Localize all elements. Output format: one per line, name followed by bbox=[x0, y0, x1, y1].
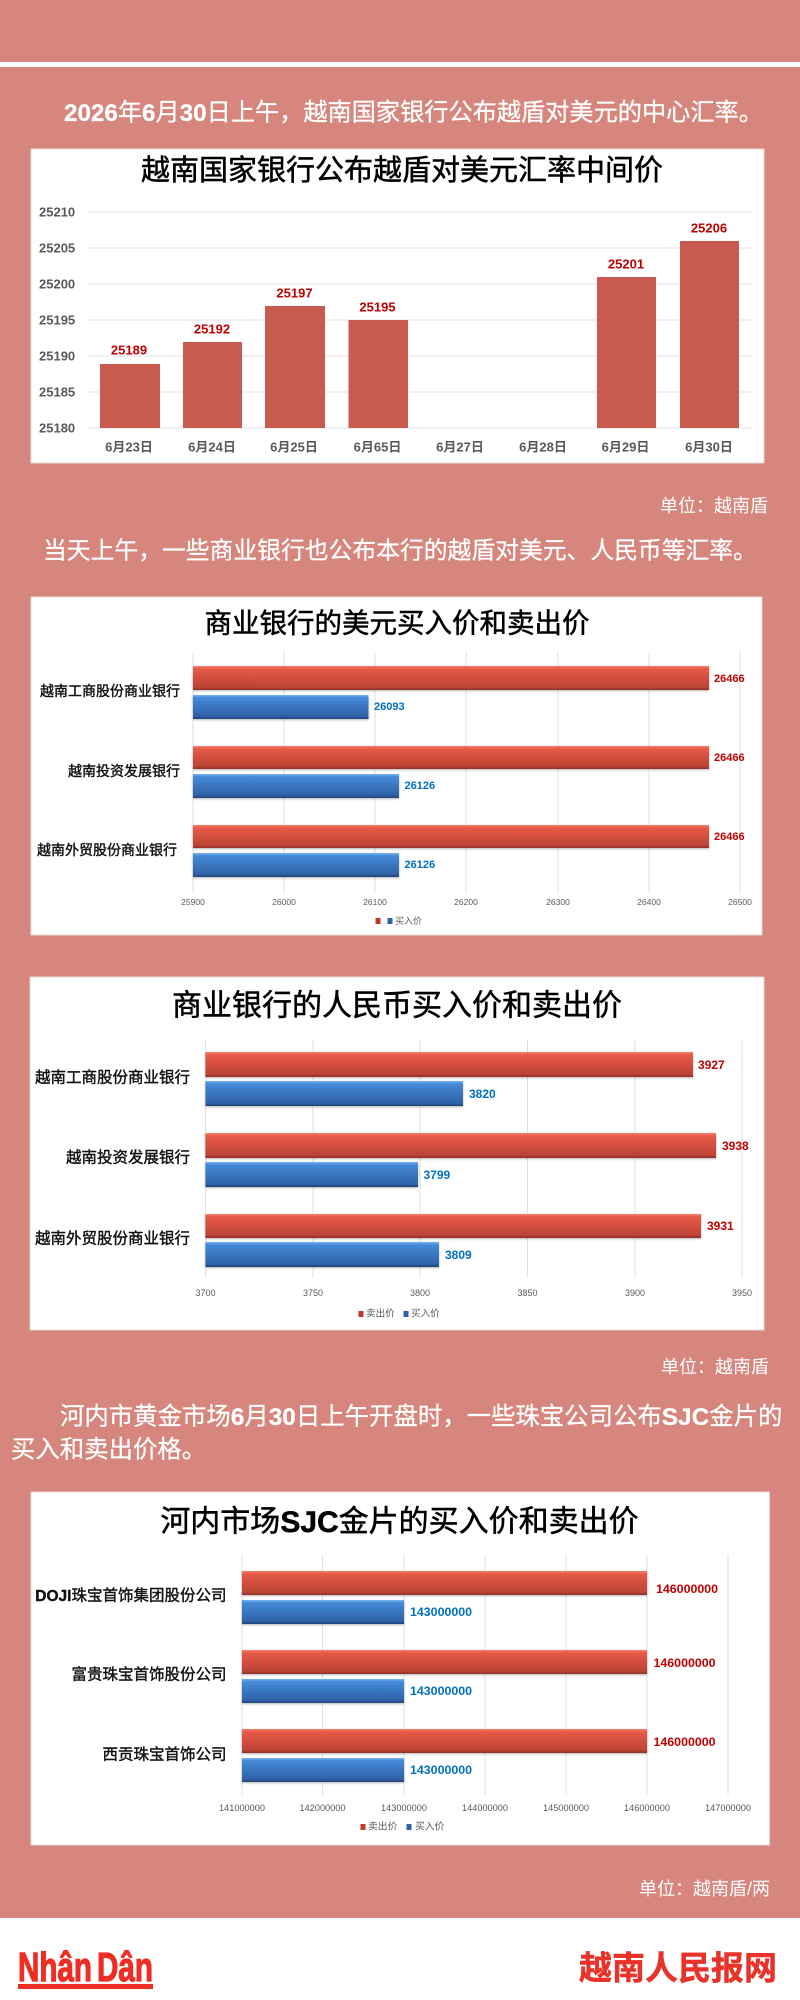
logo: Nhan Dan: Nhân bbox=[18, 1944, 92, 1990]
value labels: 26093 bbox=[374, 701, 405, 713]
panel: SJC gold buy and sell chart bbox=[31, 1492, 770, 1845]
date labels: 6月27日 bbox=[436, 440, 484, 454]
y axis gridlines and labels: 25180 bbox=[39, 420, 75, 436]
x axis labels: 3700 bbox=[195, 1288, 216, 1298]
site name: 越南人民报网 bbox=[579, 1950, 777, 1986]
y axis gridlines and labels bbox=[39, 204, 752, 436]
x axis labels bbox=[195, 1288, 752, 1298]
x axis labels bbox=[219, 1803, 751, 1813]
value labels: 3938 bbox=[722, 1139, 749, 1153]
company labels: 富贵珠宝首饰股份公司 bbox=[71, 1666, 226, 1684]
bank labels: 越南投资发展银行 bbox=[68, 763, 180, 779]
bank labels bbox=[37, 683, 180, 858]
value labels: 3927 bbox=[698, 1058, 725, 1072]
intro text: gold market: 买入和卖出价格。 bbox=[11, 1436, 206, 1464]
value labels: 26466 bbox=[714, 752, 745, 764]
bank labels: 越南投资发展银行 bbox=[66, 1148, 190, 1166]
date labels: 6月25日 bbox=[270, 440, 318, 454]
unit note 1: 单位：越南盾 bbox=[660, 496, 768, 516]
x axis labels: 146000000 bbox=[624, 1803, 670, 1813]
value labels: 26466 bbox=[714, 673, 745, 685]
value labels: 3931 bbox=[707, 1219, 734, 1233]
value labels: 26126 bbox=[404, 859, 435, 871]
date labels bbox=[105, 440, 733, 454]
x axis labels: 25900 bbox=[181, 897, 205, 907]
company labels: 西贡珠宝首饰公司 bbox=[102, 1746, 226, 1764]
value labels bbox=[410, 1582, 718, 1777]
buy bars bbox=[242, 1600, 404, 1782]
intro text: gold market bbox=[11, 1404, 782, 1464]
column value labels: 25189 bbox=[111, 342, 147, 358]
legend: 买入价 bbox=[415, 1820, 445, 1832]
sell bars bbox=[206, 1052, 716, 1238]
column value labels bbox=[111, 220, 727, 358]
x axis labels: 147000000 bbox=[705, 1803, 751, 1813]
legend bbox=[358, 1308, 440, 1320]
value labels: 3809 bbox=[445, 1248, 472, 1262]
value labels: 146000000 bbox=[654, 1656, 716, 1670]
panel: central rate column chart bbox=[31, 149, 764, 463]
value labels: 146000000 bbox=[656, 1582, 718, 1596]
x axis labels: 26300 bbox=[546, 897, 570, 907]
unit note 3: 单位：越南盾/两 bbox=[639, 1879, 770, 1899]
value labels: 143000000 bbox=[410, 1763, 472, 1777]
value labels: 143000000 bbox=[410, 1605, 472, 1619]
vertical gridlines bbox=[242, 1555, 728, 1795]
value labels: 146000000 bbox=[654, 1735, 716, 1749]
x axis labels: 3750 bbox=[303, 1288, 323, 1298]
chart title: 河内市场SJC金片的买入价和卖出价 bbox=[160, 1506, 639, 1538]
x axis labels: 143000000 bbox=[381, 1803, 427, 1813]
value labels: 26466 bbox=[714, 831, 745, 843]
x axis labels: 145000000 bbox=[543, 1803, 589, 1813]
x axis labels: 26200 bbox=[454, 897, 478, 907]
chart title: 商业银行的人民币买入价和卖出价 bbox=[172, 990, 622, 1022]
bank labels: 越南外贸股份商业银行 bbox=[35, 1230, 190, 1248]
x axis labels: 26400 bbox=[637, 897, 661, 907]
value labels bbox=[374, 673, 745, 871]
y axis gridlines and labels: 25190 bbox=[39, 348, 75, 364]
intro text: central rate: 2026年6月30日上午，越南国家银行公布越盾对美元的中心汇率。 bbox=[64, 100, 763, 126]
column bars bbox=[100, 241, 739, 428]
x axis labels: 3900 bbox=[625, 1288, 645, 1298]
intro text: gold market: 河内市黄金市场6月30日上午开盘时，一些珠宝公司公布SJC金片的 bbox=[60, 1404, 782, 1430]
vertical gridlines bbox=[193, 652, 740, 893]
chart title: 商业银行的美元买入价和卖出价 bbox=[204, 608, 590, 638]
bank labels: 越南工商股份商业银行 bbox=[40, 683, 180, 699]
white header divider bbox=[0, 62, 800, 67]
bank labels: 越南外贸股份商业银行 bbox=[37, 842, 177, 858]
x axis labels: 26500 bbox=[728, 897, 752, 907]
chart title: 越南国家银行公布越盾对美元汇率中间价 bbox=[141, 154, 663, 187]
x axis labels: 3800 bbox=[410, 1288, 430, 1298]
y axis gridlines and labels: 25195 bbox=[39, 312, 75, 328]
column value labels: 25197 bbox=[276, 286, 313, 300]
x axis labels bbox=[181, 897, 752, 907]
date labels: 6月30日 bbox=[685, 440, 733, 454]
sell bars bbox=[242, 1571, 647, 1753]
value labels: 3820 bbox=[469, 1087, 496, 1101]
sell bars bbox=[193, 666, 709, 848]
value labels bbox=[424, 1058, 749, 1262]
logo: Nhan Dan: Dân bbox=[97, 1944, 153, 1990]
y axis gridlines and labels: 25200 bbox=[39, 276, 75, 292]
value labels: 143000000 bbox=[410, 1684, 472, 1698]
x axis labels: 3850 bbox=[517, 1288, 538, 1298]
bank labels: 越南工商股份商业银行 bbox=[35, 1068, 190, 1086]
column value labels: 25192 bbox=[194, 322, 230, 336]
value labels: 26126 bbox=[404, 780, 435, 792]
x axis labels: 26100 bbox=[363, 897, 387, 907]
column value labels: 25201 bbox=[608, 256, 644, 272]
date labels: 6月29日 bbox=[602, 440, 649, 454]
x axis labels: 3950 bbox=[732, 1288, 752, 1298]
date labels: 6月65日 bbox=[354, 440, 401, 454]
y axis gridlines and labels: 25185 bbox=[39, 384, 75, 400]
legend: 卖出价 bbox=[366, 1308, 395, 1320]
bank labels bbox=[35, 1068, 190, 1248]
buy bars bbox=[193, 695, 399, 877]
panel: CNY buy and sell chart bbox=[30, 977, 764, 1330]
y axis gridlines and labels: 25210 bbox=[39, 204, 75, 220]
vertical gridlines bbox=[206, 1040, 742, 1278]
legend: 买入价 bbox=[411, 1308, 440, 1320]
company labels: DOJI珠宝首饰集团股份公司 bbox=[35, 1586, 226, 1604]
buy bars bbox=[206, 1081, 463, 1267]
intro text: commercial banks: 当天上午，一些商业银行也公布本行的越盾对美元、人民币等汇率。 bbox=[43, 538, 757, 564]
column value labels: 25206 bbox=[691, 220, 727, 236]
legend: 卖出价 bbox=[368, 1820, 398, 1832]
x axis labels: 142000000 bbox=[300, 1803, 346, 1813]
legend: 买入价 bbox=[395, 916, 422, 926]
legend bbox=[360, 1820, 445, 1832]
legend bbox=[376, 916, 422, 926]
unit note 2: 单位：越南盾 bbox=[661, 1357, 769, 1377]
panel: USD buy and sell chart bbox=[31, 597, 762, 935]
date labels: 6月28日 bbox=[519, 440, 567, 454]
date labels: 6月23日 bbox=[105, 440, 153, 454]
y axis gridlines and labels: 25205 bbox=[39, 240, 75, 256]
company labels bbox=[35, 1586, 226, 1764]
column value labels: 25195 bbox=[359, 300, 396, 314]
x axis labels: 144000000 bbox=[462, 1803, 508, 1813]
x axis labels: 26000 bbox=[272, 897, 296, 907]
date labels: 6月24日 bbox=[188, 440, 236, 454]
x axis labels: 141000000 bbox=[219, 1803, 265, 1813]
value labels: 3799 bbox=[424, 1168, 451, 1182]
